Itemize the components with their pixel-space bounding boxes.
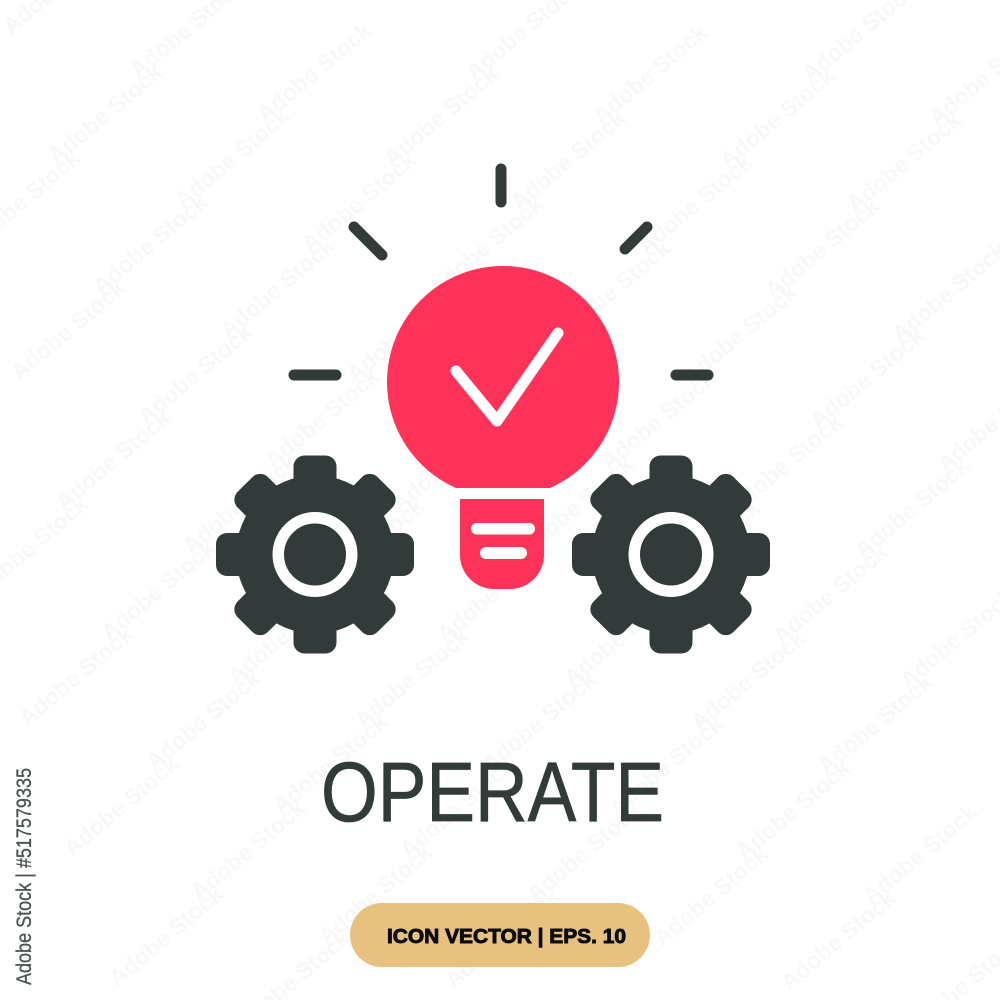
watermark pattern: Adobe Stock [170, 103, 294, 213]
watermark pattern: Adobe Stock [215, 233, 339, 343]
side credit text: Adobe Stock | #517579335 [13, 768, 36, 985]
badge [350, 903, 650, 967]
watermark pattern: Adobe Stock [350, 623, 474, 733]
icon: right gear [572, 456, 770, 654]
title: OPERATE [321, 745, 664, 839]
watermark pattern: Adobe Stock [178, 449, 302, 559]
watermark pattern: Adobe Stock [686, 625, 810, 735]
watermark pattern: Adobe Stock [6, 275, 130, 385]
watermark pattern: Adobe Stock [313, 839, 437, 949]
watermark pattern: Adobe Stock [59, 751, 183, 861]
watermark pattern: Adobe Stock [850, 453, 974, 563]
watermark pattern: Adobe Stock [604, 711, 728, 821]
watermark pattern: Adobe Stock [649, 841, 773, 951]
watermark pattern: Adobe Stock [596, 365, 720, 475]
watermark pattern: Adobe Stock [395, 753, 519, 863]
watermark pattern: Adobe Stock [297, 147, 421, 257]
watermark pattern: Adobe Stock [104, 881, 228, 991]
watermark pattern: Adobe Stock [514, 451, 638, 561]
watermark pattern: Adobe Stock [768, 539, 892, 649]
watermark pattern: Adobe Stock [14, 621, 138, 731]
watermark pattern: Adobe Stock [506, 105, 630, 215]
watermark pattern: Adobe Stock [633, 149, 757, 259]
watermark pattern: Adobe Stock [776, 885, 900, 995]
icon: left gear [216, 456, 414, 654]
watermark pattern: Adobe Stock [715, 63, 839, 173]
watermark pattern: Adobe Stock [88, 189, 212, 299]
watermark pattern: Adobe Stock [678, 279, 802, 389]
watermark pattern: Adobe Stock [141, 665, 265, 775]
watermark pattern: Adobe Stock [641, 495, 765, 605]
watermark pattern: Adobe Stock [387, 407, 511, 517]
watermark pattern: Adobe Stock [469, 321, 593, 431]
watermark pattern: Adobe Stock [813, 669, 937, 779]
watermark pattern: Adobe Stock [342, 277, 466, 387]
icon: light rays [294, 169, 708, 375]
icon: light bulb [387, 266, 619, 589]
watermark pattern: Adobe Stock [559, 581, 683, 691]
badge: ICON VECTOR | EPS. 10 [387, 926, 626, 948]
watermark pattern: Adobe Stock [305, 493, 429, 603]
watermark pattern: Adobe Stock [440, 883, 564, 993]
watermark pattern: Adobe Stock [260, 363, 384, 473]
watermark pattern: Adobe Stock [723, 409, 847, 519]
watermark pattern: Adobe Stock [223, 579, 347, 689]
watermark pattern: Adobe Stock [133, 319, 257, 429]
watermark pattern: Adobe Stock [268, 709, 392, 819]
watermark pattern: Adobe Stock [96, 535, 220, 645]
watermark pattern: Adobe Stock [186, 795, 310, 905]
watermark pattern: Adobe Stock [805, 323, 929, 433]
watermark pattern: Adobe Stock [379, 61, 503, 171]
watermark pattern: Adobe Stock [760, 193, 884, 303]
watermark pattern: Adobe Stock [522, 797, 646, 907]
watermark pattern: Adobe Stock [432, 537, 556, 647]
watermark pattern: Adobe Stock [588, 19, 712, 129]
watermark pattern: Adobe Stock [551, 235, 675, 345]
watermark pattern: Adobe Stock [51, 405, 175, 515]
watermark pattern: Adobe Stock [477, 667, 601, 777]
watermark pattern: Adobe Stock [858, 799, 982, 909]
watermark pattern: Adobe Stock [43, 59, 167, 169]
watermark pattern: Adobe Stock [842, 107, 966, 217]
watermark pattern: Adobe Stock [252, 17, 376, 127]
watermark pattern: Adobe Stock [731, 755, 855, 865]
watermark pattern: Adobe Stock [424, 191, 548, 301]
